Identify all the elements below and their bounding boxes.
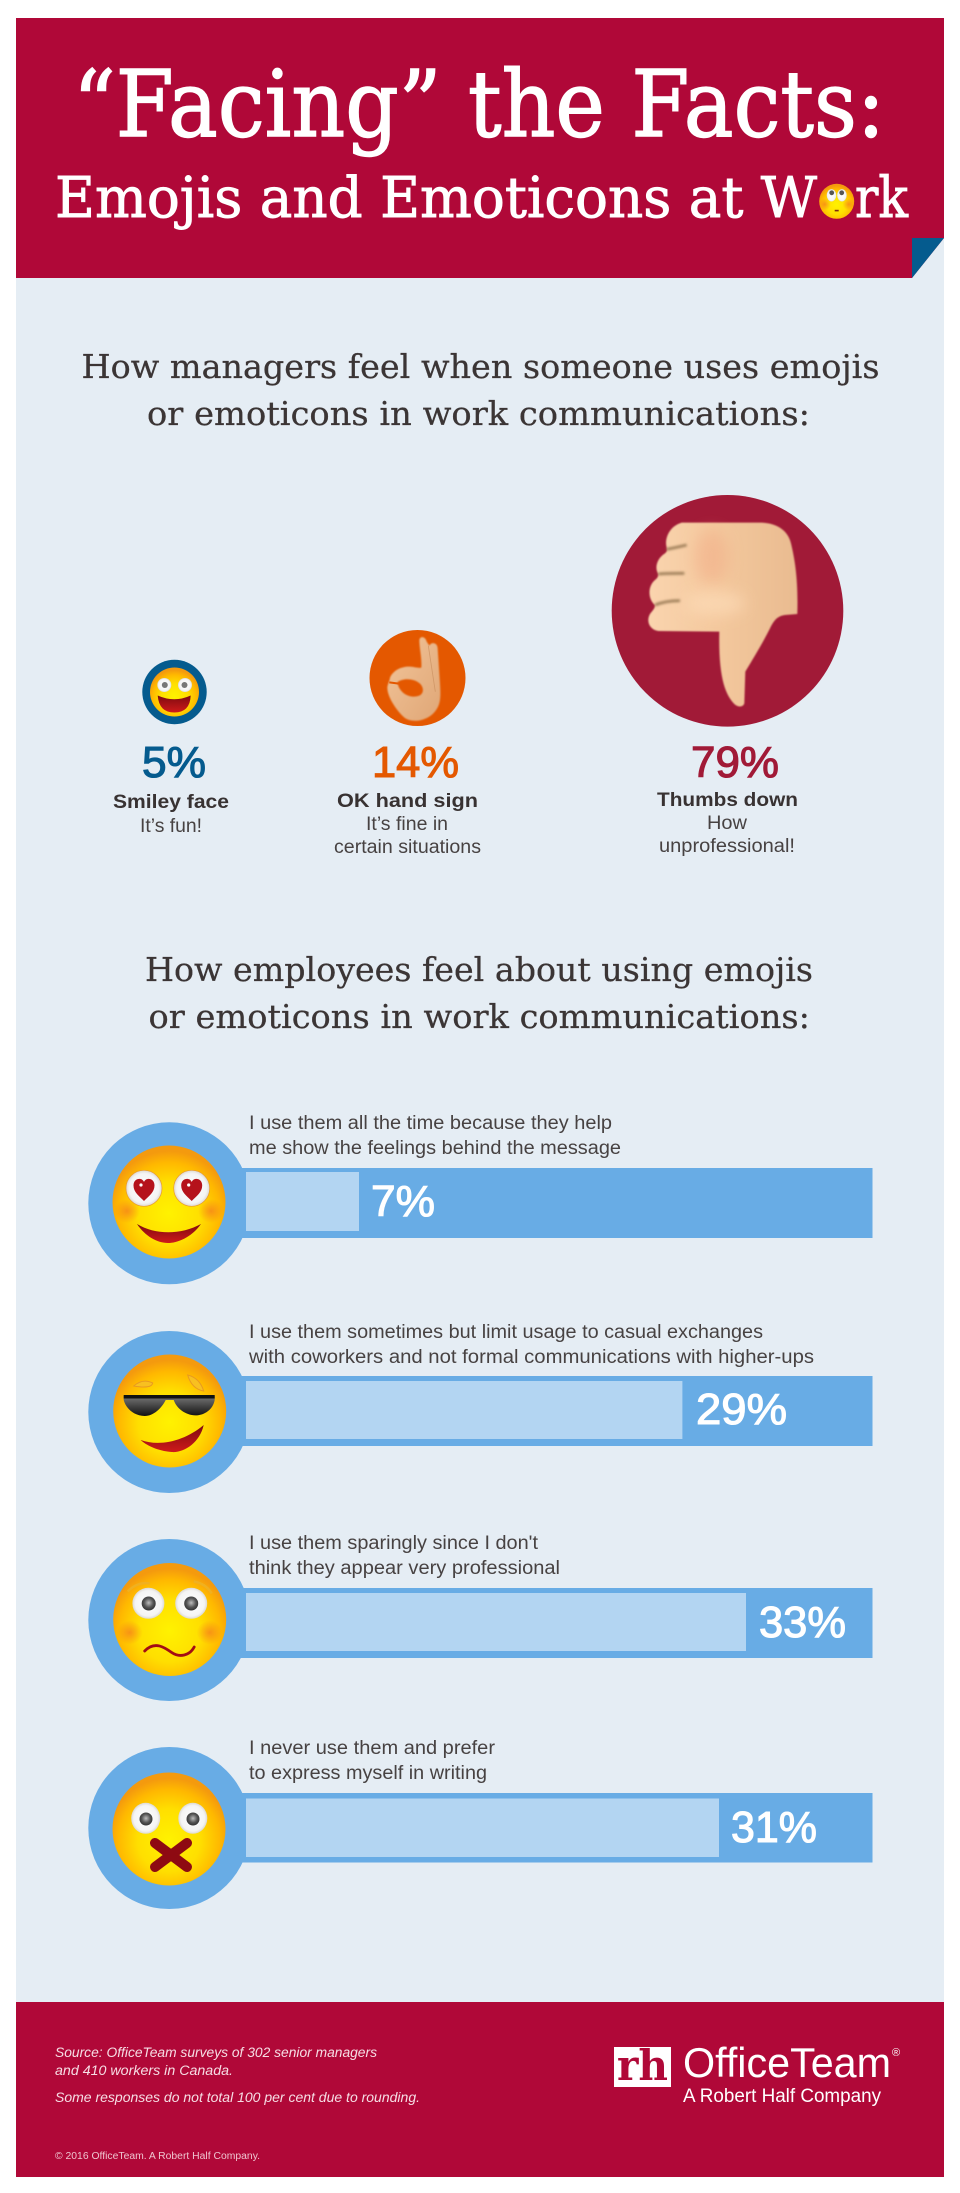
circle backdrop (88, 1122, 250, 1284)
statement (249, 1533, 560, 1579)
row: never use them 31% (88, 1738, 873, 1909)
value: 7% (371, 1177, 435, 1226)
statement: to express myself in writing (249, 1763, 487, 1784)
stat: thumbs down 79% (612, 495, 843, 857)
heading: employees: How employees feel about using emojis (145, 950, 813, 989)
description: certain situations (334, 837, 481, 858)
title line 2: rk (855, 166, 909, 231)
icon: worried emoji (113, 1563, 226, 1676)
bar track (240, 1168, 872, 1238)
label: Smiley face (113, 791, 229, 813)
heading: employees: or emoticons in work communications: (148, 997, 810, 1036)
bar fill (246, 1798, 719, 1857)
banner background (16, 18, 944, 278)
circle backdrop (88, 1331, 250, 1493)
heading: managers (82, 347, 880, 433)
statement: I never use them and prefer (249, 1738, 496, 1759)
logo: ® (892, 2047, 900, 2059)
row: use them all the time 7% (88, 1113, 873, 1284)
icon: heart eyes emoji (112, 1146, 226, 1258)
description: It’s fun! (140, 816, 202, 837)
icon: OK hand (370, 630, 466, 726)
label: OK hand sign (337, 790, 478, 812)
circle backdrop (88, 1539, 250, 1701)
statement: I use them sometimes but limit usage to casual exchanges (249, 1322, 763, 1343)
value: 31% (731, 1803, 817, 1852)
title line 2: o (821, 166, 853, 231)
source note (55, 2045, 420, 2105)
value: 33% (759, 1598, 846, 1647)
source note: Some responses do not total 100 per cent due to rounding. (55, 2090, 420, 2105)
value: 29% (696, 1385, 787, 1434)
bar fill (246, 1172, 359, 1231)
logo (614, 2039, 900, 2107)
row: use them sometimes 29% (88, 1322, 873, 1493)
icon: thumbs down (612, 495, 843, 727)
icon: smiley face (142, 660, 207, 724)
circle backdrop (88, 1747, 250, 1909)
logo: OfficeTeam (683, 2039, 891, 2086)
bar track (240, 1793, 872, 1862)
statement: me show the feelings behind the message (249, 1138, 621, 1159)
footer background (16, 2002, 944, 2177)
stat: smiley face 5% (113, 660, 229, 837)
description: It’s fine in (366, 814, 448, 835)
logo: rh (617, 2041, 668, 2090)
row: use them sparingly 33% (88, 1533, 873, 1701)
statement (249, 1738, 496, 1784)
icon: surprised emoji as the letter o (819, 184, 855, 219)
description (659, 813, 795, 857)
copyright: © 2016 OfficeTeam. A Robert Half Company. (55, 2151, 260, 2162)
value: 79% (691, 738, 779, 787)
bar track (240, 1588, 872, 1658)
logo: A Robert Half Company (683, 2086, 881, 2107)
statement (248, 1322, 814, 1368)
bar fill (246, 1593, 746, 1651)
source note: and 410 workers in Canada. (55, 2063, 233, 2078)
bar fill (246, 1381, 682, 1439)
header banner (16, 18, 944, 278)
statement: think they appear very professional (249, 1558, 560, 1579)
folded corner (912, 238, 944, 278)
footer panel (16, 2002, 944, 2177)
statement: I use them sparingly since I don't (249, 1533, 539, 1554)
statement: I use them all the time because they help (249, 1113, 612, 1134)
heading: managers: or emoticons in work communications: (147, 394, 810, 433)
title line 1: “Facing” the Facts: (73, 51, 885, 158)
heading: employees (145, 950, 813, 1036)
stat: OK hand sign 14% (334, 630, 481, 858)
icon: sunglasses emoji (113, 1354, 226, 1468)
title line 2: Emojis and Emoticons at W (55, 166, 817, 231)
statement (249, 1113, 621, 1159)
statement: with coworkers and not formal communications with higher-ups (248, 1347, 814, 1368)
icon: crossed mouth emoji (112, 1772, 226, 1886)
label: Thumbs down (657, 789, 798, 811)
description (334, 814, 481, 858)
value: 5% (142, 738, 206, 787)
description: unprofessional! (659, 836, 795, 857)
source note: Source: OfficeTeam surveys of 302 senior managers (55, 2045, 377, 2060)
bar track (240, 1376, 872, 1446)
heading: managers: How managers feel when someone uses emojis (82, 347, 880, 386)
description: How (707, 813, 747, 834)
value: 14% (372, 738, 459, 787)
